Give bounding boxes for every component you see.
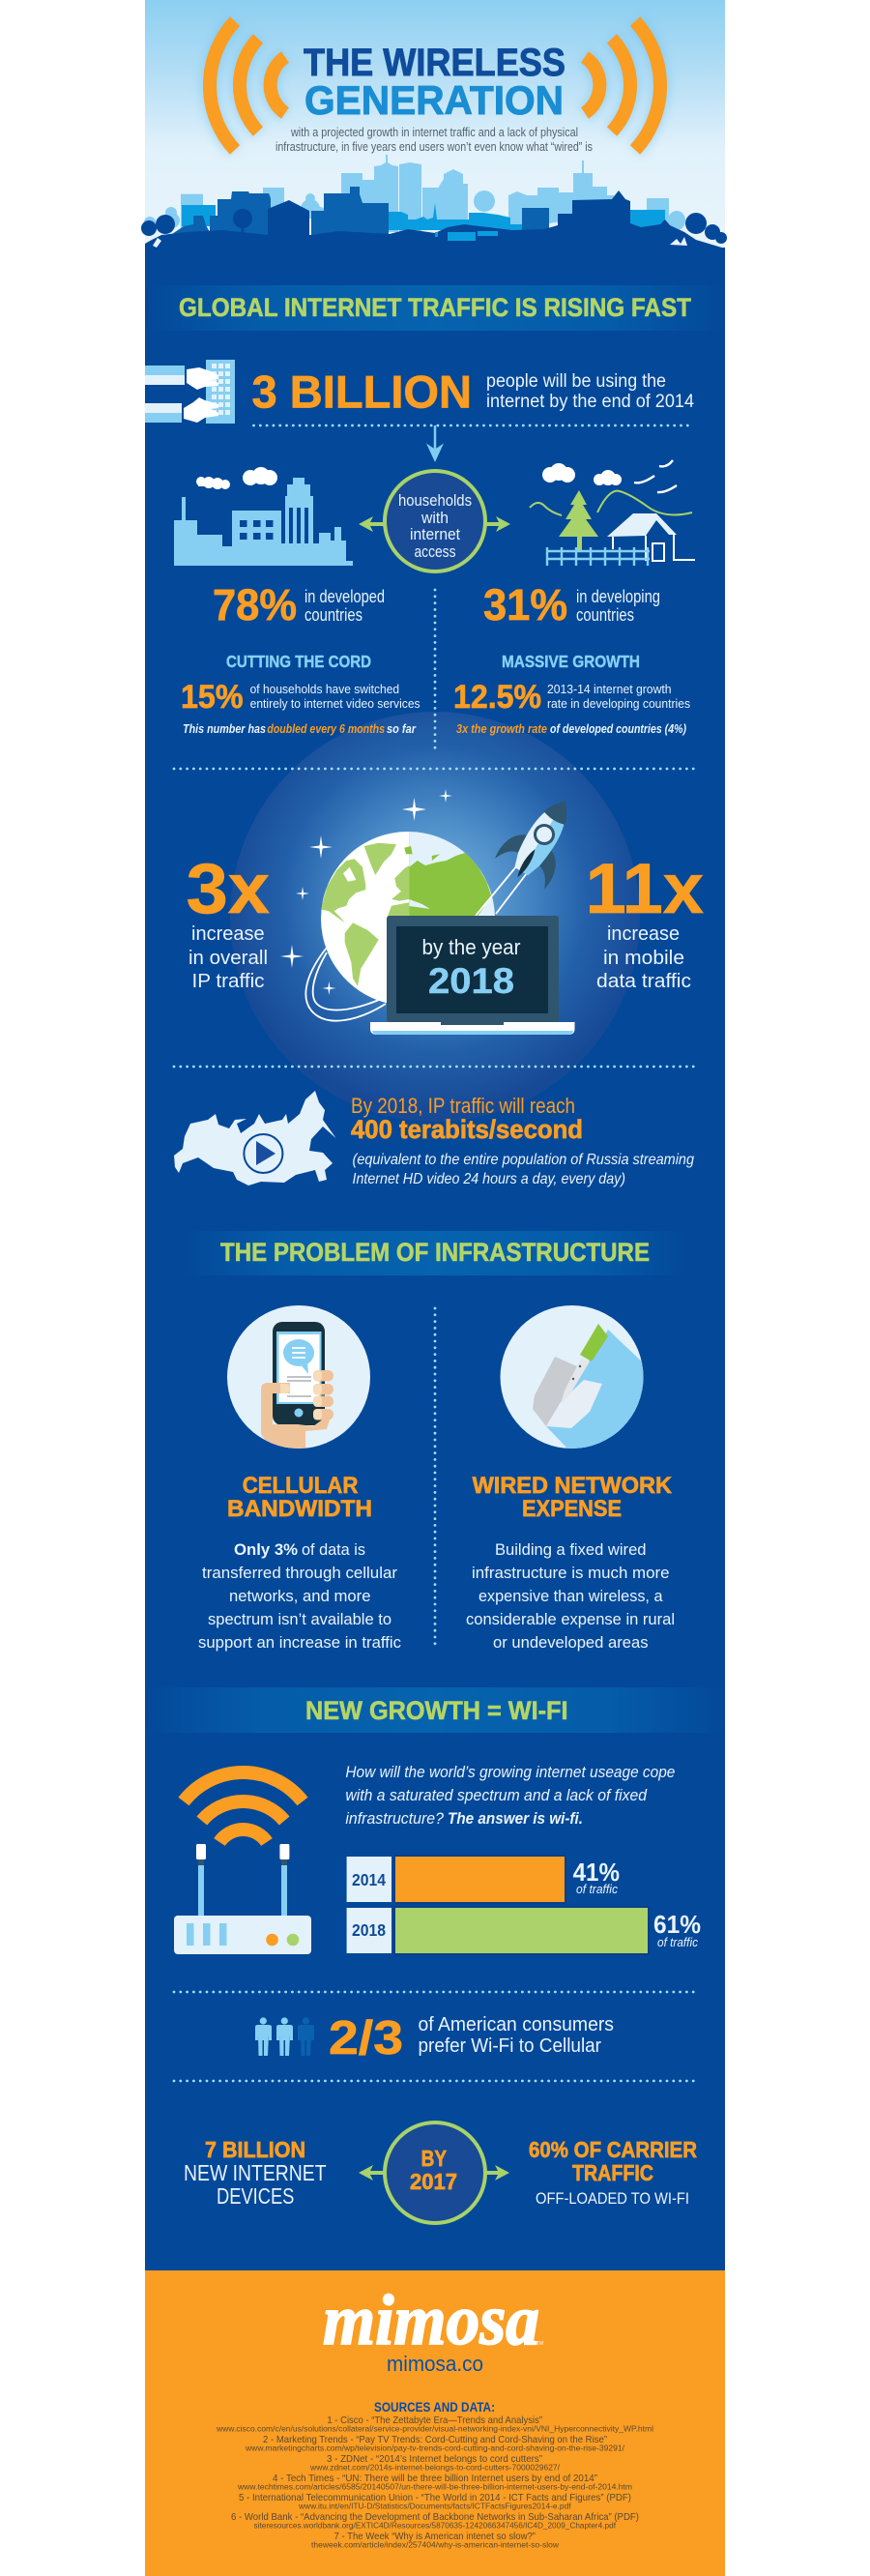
icon: right signal arcs	[585, 21, 660, 150]
sources list	[216, 2415, 653, 2550]
panel: massive growth: MASSIVE GROWTH	[502, 652, 640, 671]
website: mimosa.co	[387, 2352, 483, 2376]
text block: wi-fi question: How will the world’s growing internet useage cope	[345, 1763, 675, 1781]
icon: left signal arcs	[210, 21, 285, 150]
icon: shovel	[501, 1305, 646, 1449]
light buildings	[144, 155, 685, 232]
stat: 7 billion devices: DEVICES	[217, 2183, 294, 2209]
sources list: theweek.com/article/index/257404/why-is-american-internet-so-slow	[311, 2541, 559, 2550]
panel: massive growth: 12.5%	[453, 679, 541, 716]
stat: 3x: in overall	[188, 947, 268, 969]
body text: transferred through cellular	[202, 1564, 397, 1582]
bar 2014: 41%	[573, 1858, 620, 1887]
sources list: 2 - Marketing Trends - “Pay TV Trends: Cord-Cutting and Cord-Shaving on the Rise”	[263, 2434, 607, 2445]
tree on mid-tone	[233, 209, 252, 236]
rocket trails	[476, 865, 527, 916]
stat: 78% developed: 78%	[213, 580, 297, 629]
body text	[466, 1540, 675, 1652]
sources list: 6 - World Bank - “Advancing the Development of Backbone Networks in Sub-Saharan Africa” (PDF)	[231, 2511, 639, 2523]
icon: wifi router	[174, 1772, 311, 1954]
icon: orbit rings	[305, 948, 386, 1021]
stat: 11x: 11x	[586, 850, 704, 928]
circle text: 2017	[410, 2169, 457, 2194]
illustration: city skyline	[141, 155, 727, 251]
heading: BANDWIDTH	[227, 1496, 372, 1522]
text block: wi-fi question: infrastructure?	[345, 1809, 444, 1828]
body text: of data is	[302, 1540, 365, 1559]
stat: two thirds: 2/3	[329, 2012, 403, 2064]
icon: rural house and tree	[530, 460, 695, 566]
stat: 11x	[586, 850, 704, 992]
circle text: households	[398, 491, 472, 510]
body text: or undeveloped areas	[493, 1633, 648, 1652]
stat: 78% developed: countries	[304, 605, 362, 625]
mid-tone buildings	[172, 187, 549, 235]
bar 2018: 61%	[653, 1910, 701, 1939]
circle text: with	[420, 509, 449, 527]
stat: 3x: IP traffic	[191, 970, 265, 992]
stat caption	[486, 371, 694, 412]
heading	[473, 1473, 673, 1522]
panel: page background	[145, 0, 725, 2576]
stat: 60% of carrier traffic: TRAFFIC	[572, 2160, 653, 2185]
panel: footer	[145, 2270, 725, 2576]
sources heading: SOURCES AND DATA:	[374, 2400, 495, 2415]
panel: cutting the cord: 15%	[181, 679, 244, 716]
text block: 400 terabits per second	[351, 1094, 694, 1187]
arrow left	[359, 516, 384, 532]
big stat: 3 billion: 3 BILLION	[251, 366, 472, 418]
section banner: global traffic	[145, 285, 725, 331]
subtitle	[276, 126, 593, 154]
text block: 400 terabits per second: 400 terabits/second	[351, 1115, 583, 1144]
body text: Only 3%	[234, 1540, 298, 1559]
hills	[530, 491, 692, 515]
sources list: siteresources.worldbank.org/EXTIC4D/Resources/5870635-1242066347456/IC4D_2009_Chapter4.pdf	[253, 2522, 617, 2531]
sources list: www.marketingcharts.com/wp/television/pay-tv-trends-cord-cutting-and-cord-shaving-on-the-rise-39291/	[245, 2444, 625, 2453]
circle text	[410, 2146, 457, 2194]
icon: city	[174, 467, 353, 566]
stat: two thirds	[329, 2012, 614, 2064]
body text: spectrum isn’t available to	[208, 1610, 392, 1628]
icon: laptop: 2018	[428, 961, 514, 1001]
stat: 7 billion devices: NEW INTERNET	[184, 2160, 327, 2185]
panel: massive growth: rate in developing countries	[547, 696, 690, 711]
stat: 3x	[187, 850, 270, 992]
subtitle: infrastructure, in five years end users won’t even know what “wired” is	[276, 140, 593, 154]
dark foreground	[145, 190, 725, 251]
panel: cutting the cord: entirely to internet video services	[250, 696, 420, 711]
medium buildings	[182, 203, 665, 234]
bar 2018	[347, 1906, 701, 1955]
panel: massive growth: 3x the growth rate	[456, 722, 547, 736]
circle text: access	[414, 542, 456, 561]
logo: TM	[536, 2341, 543, 2347]
clouds	[196, 467, 277, 489]
bar 2014	[347, 1855, 620, 1904]
text block: wi-fi question: with a saturated spectrum and a lack of fixed	[345, 1786, 647, 1804]
stat: 11x: in mobile	[603, 947, 684, 969]
body text: networks, and more	[229, 1587, 371, 1605]
circle text: BY	[421, 2146, 447, 2171]
circle text: internet	[410, 525, 460, 543]
panel: massive growth: of developed countries (4%)	[550, 722, 686, 736]
body text	[198, 1540, 401, 1652]
stat: 31% developing: countries	[576, 605, 634, 625]
panel: cutting the cord	[181, 652, 420, 736]
stat: 3x: 3x	[187, 850, 270, 928]
title: GENERATION	[304, 77, 564, 123]
icon: globe	[319, 832, 496, 1006]
body text: expensive than wireless, a	[478, 1587, 663, 1605]
arrow right	[486, 516, 510, 532]
text block: 400 terabits per second: (equivalent to the entire population of Russia streaming	[352, 1152, 694, 1168]
sources list: 4 - Tech Times - “UN: There will be three billion Internet users by end of 2014”	[273, 2473, 597, 2484]
sources list: 5 - International Telecommunication Union - “The World in 2014 - ICT Facts and Figures” (PDF)	[239, 2492, 631, 2503]
stat: 11x: increase	[607, 922, 680, 945]
router body	[174, 1916, 311, 1954]
body text: Building a fixed wired	[495, 1540, 646, 1559]
chat bubble	[283, 1339, 314, 1366]
panel: massive growth	[453, 652, 690, 736]
sources list: 3 - ZDNet - “2014’s Internet belongs to cord cutters”	[327, 2453, 542, 2465]
stat caption: people will be using the	[486, 371, 666, 392]
clouds	[542, 463, 622, 485]
panel: header sky	[145, 0, 725, 248]
land: light green	[319, 843, 409, 986]
bar 2014: 2014	[352, 1870, 386, 1889]
section banner: infrastructure	[184, 1231, 686, 1275]
stat: 3x: increase	[191, 922, 265, 945]
arrow left	[359, 2165, 384, 2181]
stat: 31% developing	[483, 580, 660, 629]
heading: THE PROBLEM OF INFRASTRUCTURE	[220, 1238, 650, 1267]
subtitle: with a projected growth in internet traffic and a lack of physical	[290, 126, 578, 139]
sources list: www.techtimes.com/articles/6585/20140507/un-there-will-be-three-billion-internet-users-by-end-of-2014.htm	[237, 2483, 632, 2492]
birds	[634, 460, 677, 492]
stat: two thirds: of American consumers	[418, 2013, 614, 2035]
panel: cutting the cord: doubled every 6 months	[267, 722, 385, 736]
icon: households circle	[359, 471, 510, 571]
sources list: www.zdnet.com/2014s-internet-belongs-to-cord-cutters-7000029627/	[309, 2464, 561, 2473]
stat: 78% developed	[213, 580, 385, 629]
stat: 78% developed: in developed	[304, 587, 385, 606]
heading: GLOBAL INTERNET TRAFFIC IS RISING FAST	[179, 293, 691, 322]
stat: 60% of carrier traffic: 60% OF CARRIER	[529, 2137, 697, 2162]
sources list: 1 - Cisco - “The Zettabyte Era—Trends and Analysis”	[327, 2415, 542, 2426]
stat: 31% developing: 31%	[483, 580, 567, 629]
stat caption: internet by the end of 2014	[486, 392, 694, 412]
heading	[227, 1473, 372, 1522]
sources list: 7 - The Week “Why is American intenet so slow?”	[334, 2531, 536, 2542]
house	[607, 513, 677, 537]
icon: phone in hand	[227, 1305, 370, 1450]
icon: three people	[255, 2017, 314, 2056]
stat: 31% developing: in developing	[576, 587, 660, 606]
panel: massive growth: 2013-14 internet growth	[547, 682, 671, 696]
heading: EXPENSE	[522, 1496, 622, 1522]
body text: support an increase in traffic	[198, 1633, 401, 1652]
land: dark green	[404, 846, 491, 919]
tree	[559, 490, 598, 537]
bar 2018: of traffic	[657, 1935, 698, 1949]
heading: WIRED NETWORK	[473, 1473, 673, 1499]
icon: rocket	[476, 785, 591, 916]
stat: 11x: data traffic	[596, 970, 691, 992]
circle text	[398, 491, 472, 561]
panel: cutting the cord: so far	[387, 722, 417, 736]
body text: infrastructure is much more	[472, 1564, 669, 1582]
fence	[546, 547, 650, 566]
panel: cellular bandwidth	[198, 1473, 401, 1652]
icon: signal arcs glow	[210, 21, 660, 150]
heading: NEW GROWTH = WI-FI	[305, 1696, 568, 1725]
hand	[261, 1383, 333, 1450]
stat: 7 billion devices	[184, 2137, 327, 2209]
section banner: wi-fi	[145, 1687, 725, 1733]
big stat: 3 billion	[251, 366, 694, 418]
icon: hands typing on keyboard	[145, 360, 235, 424]
title	[304, 42, 566, 123]
panel: cutting the cord: CUTTING THE CORD	[226, 652, 371, 671]
stat: 60% of carrier traffic	[529, 2137, 697, 2208]
sources list: www.cisco.com/c/en/us/solutions/collateral/service-provider/visual-networking-index-vni/VNI_Hyperconnectivity_WP.html	[216, 2425, 653, 2434]
logo: mimosa	[323, 2281, 539, 2360]
sources list: www.itu.int/en/ITU-D/Statistics/Documents/facts/ICTFactsFigures2014-e.pdf	[298, 2503, 571, 2511]
stat: 7 billion devices: 7 BILLION	[205, 2137, 305, 2162]
arrow: down to households	[429, 425, 441, 459]
arrow right	[486, 2165, 509, 2181]
heading: CELLULAR	[243, 1473, 358, 1499]
bar 2018: 2018	[352, 1920, 386, 1940]
panel: cutting the cord: of households have switched	[250, 682, 399, 696]
icon: by 2017 circle	[359, 2122, 509, 2223]
icon: Russia map with play button	[174, 1091, 336, 1186]
bar chart: wi-fi share	[347, 1855, 701, 1955]
antennas	[198, 1865, 204, 1916]
icon: laptop	[370, 916, 574, 1035]
stat: 60% of carrier traffic: OFF-LOADED TO WI-FI	[536, 2190, 689, 2208]
text block: wi-fi question: The answer is wi-fi.	[448, 1809, 583, 1828]
stat: two thirds: prefer Wi-Fi to Cellular	[418, 2034, 601, 2057]
icon: stars	[280, 789, 452, 995]
panel: cutting the cord: This number has	[183, 722, 266, 736]
text block: wi-fi question	[345, 1763, 675, 1828]
signal arcs	[184, 1772, 303, 1842]
bar 2014: of traffic	[576, 1882, 618, 1896]
panel: wired network expense	[466, 1473, 675, 1652]
text block: 400 terabits per second: Internet HD video 24 hours a day, every day)	[352, 1171, 625, 1187]
panel: glow behind globe	[230, 712, 640, 1122]
body text: considerable expense in rural	[466, 1610, 675, 1628]
text block: 400 terabits per second: By 2018, IP traffic will reach	[351, 1094, 575, 1118]
title: THE WIRELESS	[304, 42, 566, 84]
laptop text: by the year	[421, 935, 520, 959]
